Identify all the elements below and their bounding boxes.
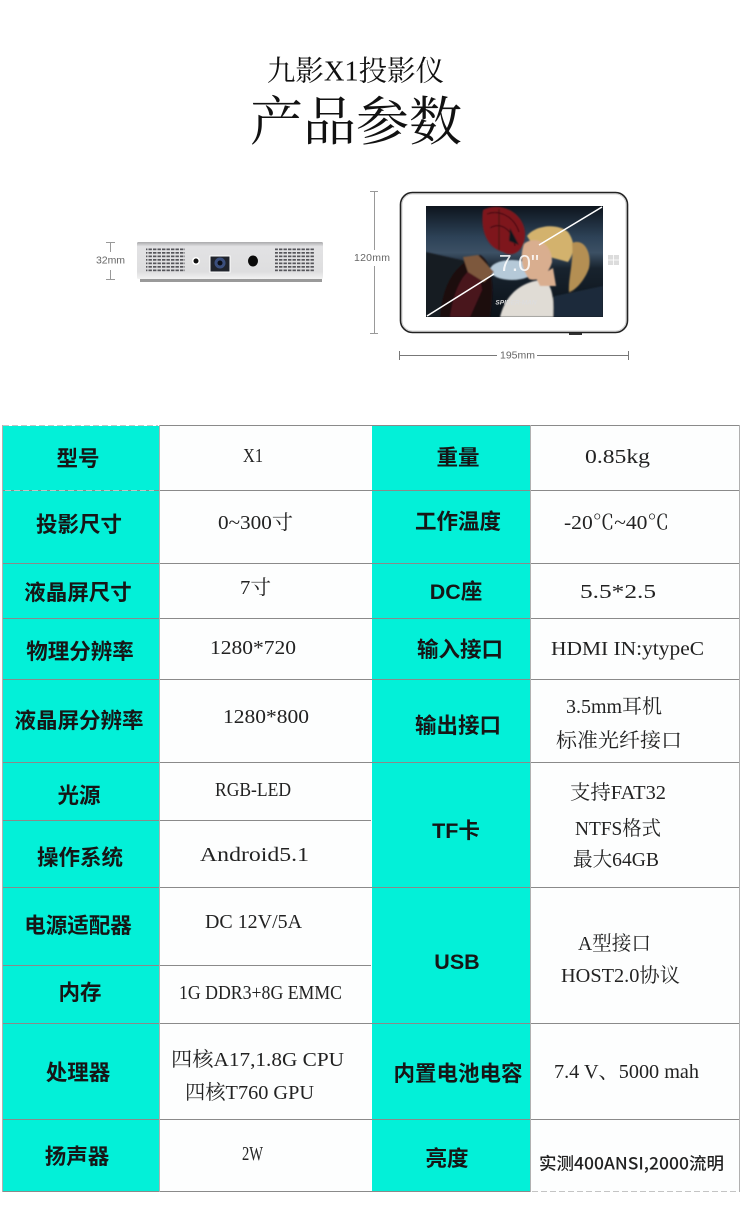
value: output headphone: 3.5mm耳机 bbox=[566, 695, 662, 718]
label: light source: 光源 bbox=[57, 784, 101, 808]
right column values bbox=[539, 446, 724, 1174]
label: input ports: 输入接口 bbox=[417, 638, 503, 662]
column backgrounds bbox=[3, 426, 739, 1192]
value: model: X1 bbox=[243, 445, 263, 467]
value: GPU: 四核T760 GPU bbox=[185, 1081, 315, 1104]
value: USB type: A型接口 bbox=[578, 932, 651, 955]
value: CPU: 四核A17,1.8G CPU bbox=[171, 1048, 345, 1071]
value: TF format: NTFS格式 bbox=[575, 817, 661, 840]
value: input ports: HDMI IN:ytypeC bbox=[551, 638, 704, 660]
value: battery: 7.4 V、5000 mah bbox=[554, 1061, 699, 1083]
movie image on tablet screen: SPIDER-MAN bbox=[495, 300, 537, 306]
left column labels bbox=[14, 447, 144, 1169]
tablet view with dimensions bbox=[354, 192, 628, 362]
icon: tablet body bbox=[400, 192, 628, 335]
dimension: 32mm: 32mm bbox=[96, 254, 125, 266]
label: model: 型号 bbox=[56, 447, 100, 471]
label: processor: 处理器 bbox=[46, 1061, 111, 1085]
label: output ports: 输出接口 bbox=[415, 714, 501, 738]
icon: projector bbox=[137, 242, 323, 282]
label: native resolution: 物理分辨率 bbox=[26, 640, 134, 664]
value: speaker: 2W bbox=[242, 1143, 263, 1165]
title: product name: 九影X1投影仪 bbox=[267, 56, 444, 88]
value: brightness: 实测400ANSI,2000流明 bbox=[539, 1150, 724, 1174]
movie image on tablet screen bbox=[426, 206, 603, 317]
value: operating temperature: -20℃~40℃ bbox=[564, 512, 669, 534]
value: native resolution: 1280*720 bbox=[210, 637, 296, 659]
dimension: 195mm bbox=[400, 350, 628, 362]
label: projection size: 投影尺寸 bbox=[36, 513, 122, 537]
label: power adapter: 电源适配器 bbox=[24, 914, 132, 938]
label: built-in battery capacity: 内置电池电容 bbox=[393, 1061, 523, 1086]
dimension: 32mm bbox=[96, 242, 125, 280]
value: operating system: Android5.1 bbox=[200, 844, 309, 866]
value: TF maximum: 最大64GB bbox=[573, 848, 659, 871]
label: TF card: TF卡 bbox=[432, 819, 480, 843]
right column labels bbox=[393, 446, 523, 1171]
value: memory: 1G DDR3+8G EMMC bbox=[179, 982, 342, 1004]
value: DC jack: 5.5*2.5 bbox=[580, 581, 656, 603]
label: DC jack: DC座 bbox=[430, 579, 482, 604]
label: weight: 重量 bbox=[436, 446, 480, 470]
value: light source: RGB-LED bbox=[215, 779, 291, 801]
dimension: 195mm: 195mm bbox=[500, 350, 535, 362]
label: USB: USB bbox=[434, 950, 480, 974]
value: power adapter: DC 12V/5A bbox=[205, 911, 303, 933]
label: speaker: 扬声器 bbox=[45, 1145, 110, 1169]
left column values bbox=[171, 445, 345, 1165]
label: memory: 内存 bbox=[58, 981, 102, 1005]
label: operating temperature: 工作温度 bbox=[415, 510, 501, 534]
value: LCD resolution: 1280*800 bbox=[223, 706, 309, 728]
movie image on tablet screen: 7.0" bbox=[499, 250, 539, 276]
projector front view with height dimension bbox=[96, 242, 323, 282]
value: projection size: 0~300寸 bbox=[218, 511, 293, 534]
value: USB protocol: HOST2.0协议 bbox=[561, 964, 680, 987]
label: brightness: 亮度 bbox=[425, 1146, 469, 1171]
label: LCD size: 液晶屏尺寸 bbox=[24, 581, 132, 605]
dimension: 120mm: 120mm bbox=[354, 252, 390, 264]
value: LCD size: 7寸 bbox=[240, 576, 271, 599]
value: output optical: 标准光纤接口 bbox=[556, 729, 682, 752]
value: weight: 0.85kg bbox=[585, 446, 650, 468]
heading: product parameters: 产品参数 bbox=[250, 94, 462, 152]
specification table bbox=[2, 425, 740, 1192]
label: LCD resolution: 液晶屏分辨率 bbox=[14, 709, 144, 733]
dimension: 120mm bbox=[354, 192, 390, 334]
label: operating system: 操作系统 bbox=[37, 845, 123, 870]
value: TF support: 支持FAT32 bbox=[570, 781, 666, 804]
